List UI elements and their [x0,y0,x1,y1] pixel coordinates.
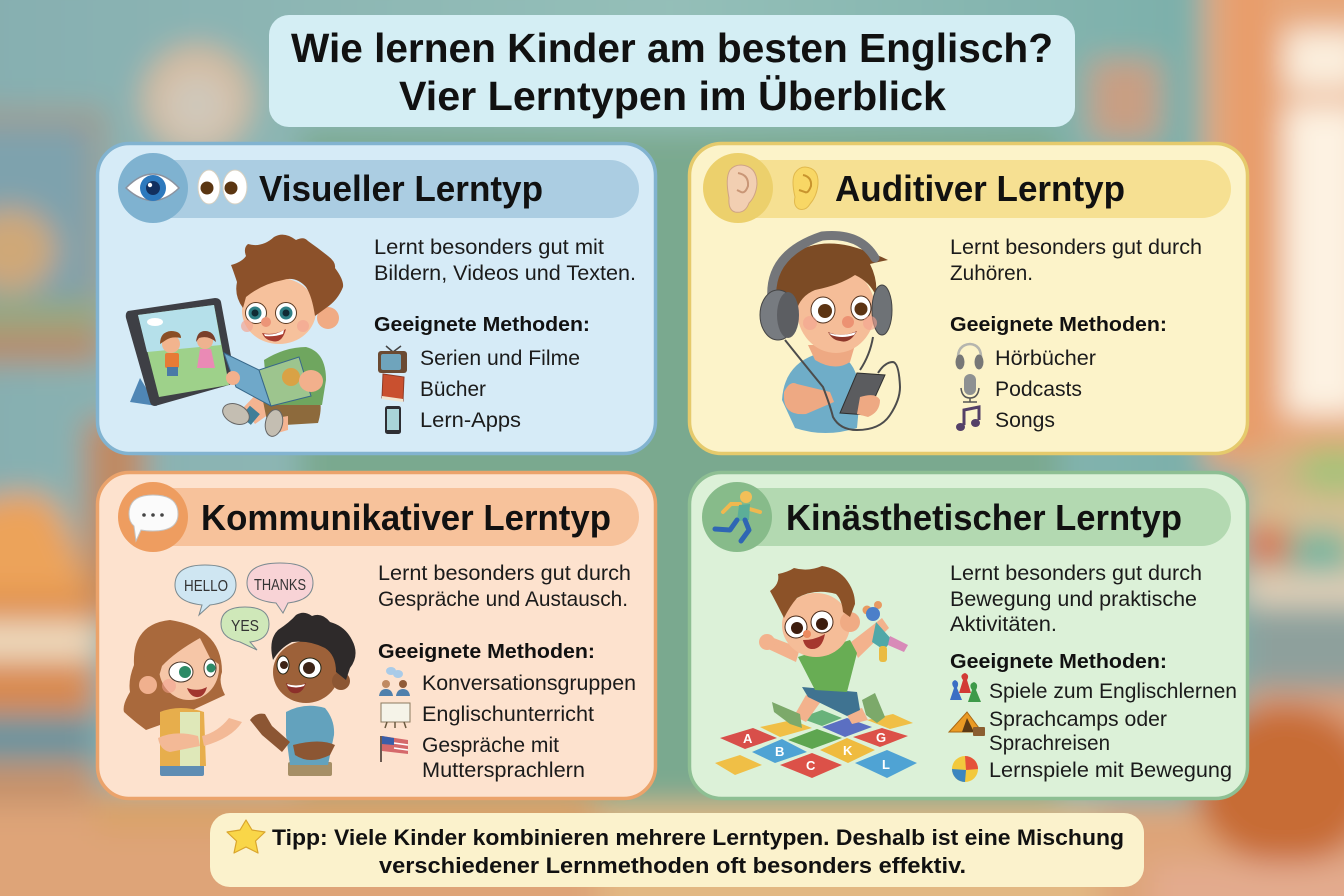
header bar: kinästhetischer Lerntyp: Kinästhetischer Lerntyp [786,497,1182,538]
icon: smartphone [385,406,401,434]
tip box: verschiedener Lernmethoden oft besonders effektiv. [379,853,966,878]
methods: auditiver: Podcasts [995,378,1082,401]
methods: kinästhetischer: Sprachcamps oder [989,708,1167,731]
illustration: boy with headphones [760,235,900,433]
text: auditiver description [950,236,1202,285]
panel: visueller Lerntyp [98,144,656,454]
methods: auditiver: Songs [995,409,1055,432]
icon: tent [949,712,985,736]
letter mat: L [882,757,890,772]
letter mat: A [743,731,753,746]
text: kommunikativer description: Gespräche und Austausch. [378,588,628,611]
illustration: boy talking [250,613,356,776]
toy [862,601,908,662]
text: kommunikativer description: Lernt besonders gut durch [378,562,631,585]
methods: auditiver: Geeignete Methoden: [950,314,1167,336]
icon: American flag [381,736,408,762]
letter mat [715,710,917,778]
icon: yellow ear emoji [793,167,818,209]
methods: kommunikativer: Muttersprachlern [422,759,585,782]
header bar: visueller Lerntyp: Visueller Lerntyp [259,168,543,209]
illustration: speech bubbles: THANKS [254,577,306,594]
icon: people talking [379,667,410,696]
methods: kinästhetischer: Sprachreisen [989,732,1110,755]
methods: visueller: Geeignete Methoden: [374,314,590,336]
tip box: Tipp: Viele Kinder kombinieren mehrere Lerntypen. Deshalb ist eine Mischung [272,825,1124,850]
illustration: girl talking [124,620,242,776]
icon: whiteboard [381,703,410,728]
methods: auditiver [950,314,1167,432]
methods: visueller: Serien und Filme [420,347,580,370]
icon: game pieces [950,673,981,702]
methods: kommunikativer: Konversationsgruppen [422,672,636,695]
panel: kommunikativer Lerntyp [98,472,656,798]
methods: kinästhetischer [949,651,1237,782]
text: auditiver description: Zuhören. [950,262,1033,285]
methods: kommunikativer: Englischunterricht [422,703,594,726]
illustration: jumping boy on letter mat [715,566,917,778]
methods: kommunikativer [378,641,636,782]
icon: beach ball [952,756,978,782]
header bar: auditiver Lerntyp: Auditiver Lerntyp [835,168,1125,209]
methods: kinästhetischer: Geeignete Methoden: [950,651,1167,673]
icon: microphone [961,374,979,402]
methods: kommunikativer: Geeignete Methoden: [378,641,595,663]
panel: kinästhetischer Lerntyp [690,472,1248,798]
icon: headphones [956,344,984,370]
icon: eye [126,174,179,201]
text: kommunikativer description [378,562,631,611]
text: visueller description [374,236,636,285]
icon: two eyes emoji [198,170,247,204]
icon: television [378,346,407,373]
methods: auditiver: Hörbücher [995,347,1096,370]
header bar: kinästhetischer Lerntyp [702,482,1231,552]
text: visueller description: Lernt besonders gut mit [374,236,604,259]
panel: auditiver Lerntyp [690,144,1248,454]
letter mat: G [876,730,886,745]
text: kinästhetischer description: Aktivitäten. [950,613,1057,636]
icon: book [382,374,404,402]
methods: visueller: Bücher [420,378,486,401]
title banner: Vier Lerntypen im Überblick [399,73,946,119]
icon: music note [956,407,980,431]
text: visueller description: Bildern, Videos und Texten. [374,262,636,285]
methods: visueller: Lern-Apps [420,409,521,432]
letter mat: C [806,758,816,773]
illustration: speech bubbles [175,563,313,650]
methods: kommunikativer: Gespräche mit [422,734,559,757]
title banner: Wie lernen Kinder am besten Englisch? [291,25,1053,71]
illustration: speech bubbles: YES [231,618,259,635]
tip box [210,813,1144,887]
header bar: visueller Lerntyp [118,153,639,223]
icon: ear [727,165,757,212]
icon: speech bubble [129,495,178,541]
text: kinästhetischer description [950,562,1202,636]
methods: visueller [374,314,590,434]
icon: running person [715,491,760,541]
methods: kinästhetischer: Lernspiele mit Bewegung [989,759,1232,782]
text: kinästhetischer description: Lernt besonders gut durch [950,562,1202,585]
icon: star [227,820,265,853]
text: auditiver description: Lernt besonders gut durch [950,236,1202,259]
illustration: boy with tablet and book [126,235,343,438]
header bar: kommunikativer Lerntyp [118,482,639,552]
header bar: kommunikativer Lerntyp: Kommunikativer Lerntyp [201,497,611,538]
header bar: auditiver Lerntyp [703,153,1231,223]
methods: kinästhetischer: Spiele zum Englischlernen [989,680,1237,703]
text: kinästhetischer description: Bewegung und praktische [950,588,1197,611]
illustration: speech bubbles: HELLO [184,578,228,595]
title banner [269,15,1075,127]
letter mat: K [843,743,853,758]
letter mat: B [775,744,784,759]
